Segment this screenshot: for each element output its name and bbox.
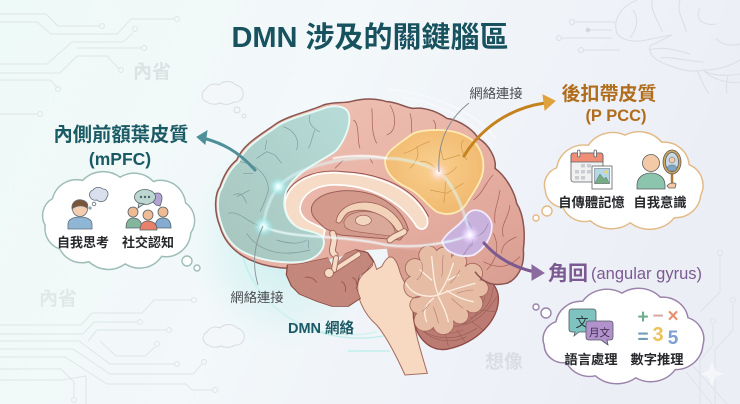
heading: PCC: [561, 83, 657, 125]
icon: self thinking person: [68, 187, 108, 229]
corpus callosum: [285, 173, 428, 237]
label: DMN network: DMN 網絡: [288, 319, 355, 337]
leader line: upper network label: [439, 103, 469, 172]
heading: PCC: (P PCC): [585, 107, 647, 125]
cloud shape: angular gyrus: [533, 288, 704, 384]
arrow: to angular gyrus: [484, 243, 544, 280]
bubble: mPFC functions: [43, 172, 200, 271]
bubble: angular gyrus functions: [533, 288, 704, 384]
heading: mPFC: [54, 124, 188, 169]
ghost word: imagination: 想像: [485, 351, 523, 373]
brain illustration: [216, 99, 524, 375]
ghost word: introspection upper: 內省: [133, 61, 171, 83]
icon: math symbols: [637, 306, 679, 349]
arrow: to PCC: [464, 95, 555, 156]
cloud shape: mPFC: [43, 172, 200, 271]
icon: translation speech bubbles: [569, 309, 613, 345]
ghost word: introspection lower: 內省: [39, 288, 77, 310]
heading: PCC: 後扣帶皮質: [561, 83, 657, 105]
region: mPFC: [218, 106, 349, 262]
title: DMN 涉及的關鍵腦區: [231, 21, 509, 54]
icon: translation speech bubbles: 文: [575, 315, 589, 330]
decorative cloud: lower: [203, 324, 244, 347]
region: PCC: [385, 130, 483, 214]
small ring: orange: [533, 215, 539, 221]
icon: math symbols: =: [637, 327, 649, 348]
icon: social group: [126, 190, 171, 230]
label: language processing: 語言處理: [564, 351, 618, 367]
arrow: to mPFC: [197, 131, 255, 170]
DMN swoosh rings: [242, 89, 495, 351]
cerebrum outer outline: [216, 99, 524, 285]
medial region: [311, 191, 408, 240]
ghost brain: top right: [556, 0, 740, 94]
icon: math symbols: +: [637, 307, 649, 328]
lower frontal and temporal lobe: [286, 249, 374, 307]
icon: translation speech bubbles: 月文: [589, 326, 610, 339]
heading: mPFC: 內側前額葉皮質: [54, 124, 188, 146]
heading: mPFC: (mPFC): [89, 149, 151, 169]
thalamus: [344, 212, 395, 237]
region: angular gyrus: [442, 210, 492, 256]
icon: math symbols: ×: [667, 306, 679, 327]
circuit pattern: bottom right: [686, 250, 736, 404]
label: social cognition: 社交認知: [122, 235, 174, 250]
label: numeric reasoning: 數字推理: [630, 351, 684, 367]
network nodes: [253, 161, 481, 246]
heading: angular gyrus: (angular gyrus): [591, 264, 702, 283]
pink area beside brainstem: [387, 245, 440, 317]
brainstem: [358, 251, 427, 375]
leader line: lower network label: [255, 226, 263, 285]
cerebellum: [413, 272, 498, 350]
decorative cloud: upper: [202, 81, 246, 118]
label: upper network connection: 網絡連接: [469, 85, 523, 101]
heading: angular gyrus: 角回: [548, 261, 588, 285]
bubble: PCC functions: [533, 132, 703, 229]
cerebrum: [216, 99, 524, 285]
icon: math symbols: 5: [668, 328, 679, 349]
label: autobiographical memory: 自傳體記憶: [558, 194, 625, 210]
cortical sulci: [335, 105, 520, 270]
circuit pattern: bottom left: [0, 298, 218, 404]
cloud shape: PCC: [533, 132, 703, 229]
sparkle: [700, 362, 724, 386]
icon: math symbols: −: [652, 306, 664, 327]
brain glow: [185, 125, 385, 355]
icon: math symbols: 3: [652, 324, 664, 346]
label: lower network connection: 網絡連接: [230, 289, 284, 305]
heading: angular gyrus: [548, 261, 702, 285]
circuit pattern: top left: [0, 14, 180, 116]
small ring: mauve: [533, 304, 539, 310]
DMN pathways: [263, 156, 470, 246]
icon: person with mirror: [637, 150, 681, 189]
cerebellum folia: [404, 246, 488, 335]
upper ventricle tubes: [332, 232, 404, 255]
label: self thinking: 自我思考: [57, 235, 109, 250]
label: self awareness: 自我意識: [633, 194, 687, 210]
icon: calendar and photo: [571, 150, 612, 189]
fornix: [336, 202, 405, 234]
